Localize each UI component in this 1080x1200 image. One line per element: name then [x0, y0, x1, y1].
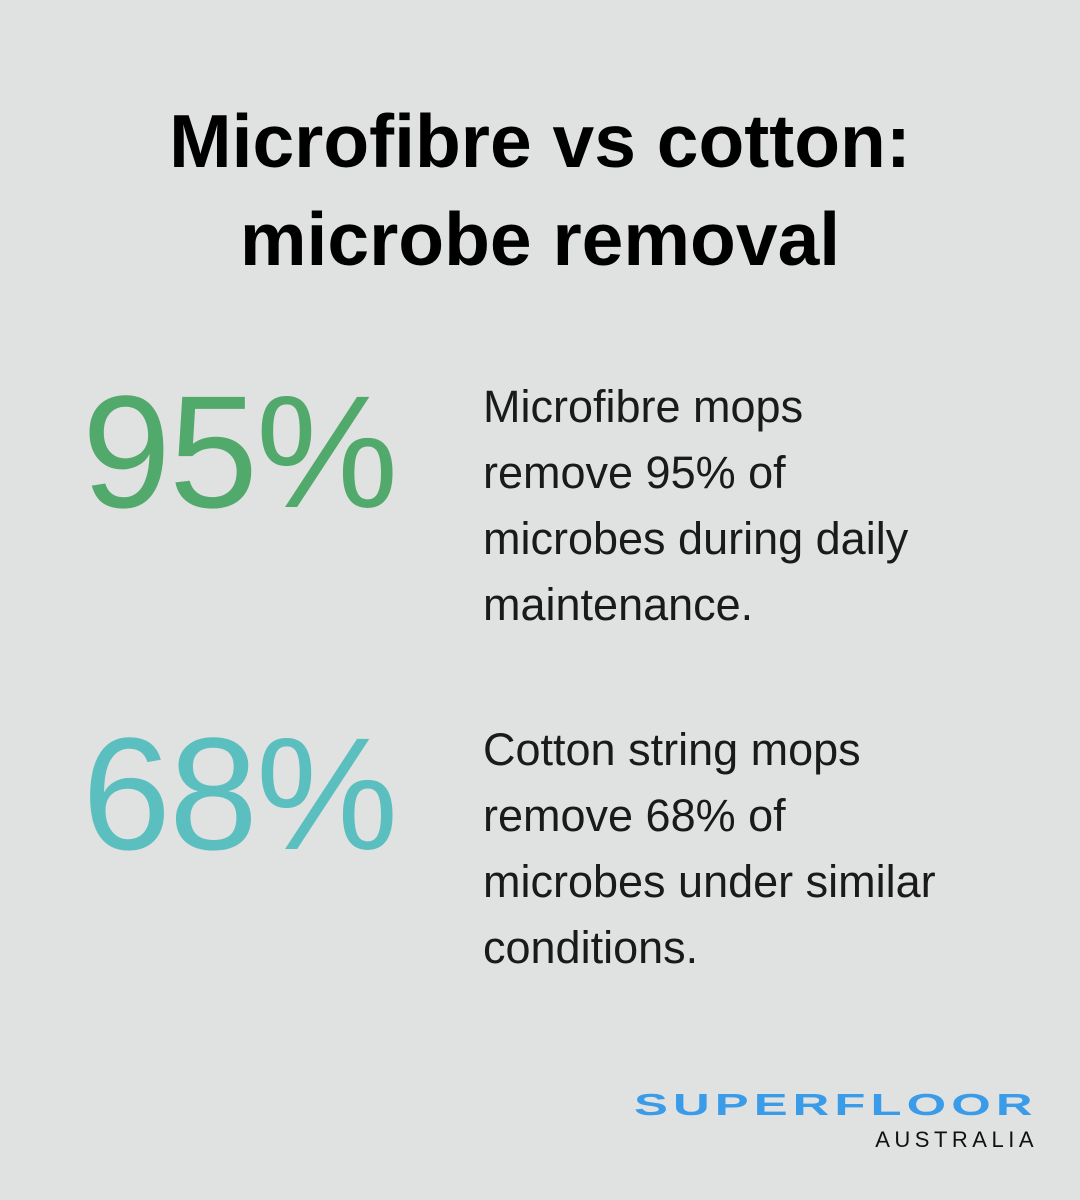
logo: Superfloor Australia — [634, 1088, 1038, 1152]
stat: microfibre 95%: 95% — [82, 362, 396, 541]
text: microfibre description: maintenance. — [483, 579, 753, 630]
text: cotton description — [483, 724, 936, 973]
text: cotton description: remove 68% of — [483, 790, 786, 841]
title — [169, 99, 911, 281]
text: cotton description: Cotton string mops — [483, 724, 861, 775]
text: microfibre description: remove 95% of — [483, 447, 786, 498]
text: microfibre description: microbes during daily — [483, 513, 908, 564]
logo: Superfloor Australia: SUPERFLOOR — [634, 1088, 1038, 1122]
title: Microfibre vs cotton: — [169, 99, 911, 183]
text: microfibre description — [483, 381, 908, 630]
text: cotton description: microbes under similar — [483, 856, 936, 907]
logo: Superfloor Australia: AUSTRALIA — [875, 1127, 1038, 1152]
text: microfibre description: Microfibre mops — [483, 381, 803, 432]
title: microbe removal — [240, 197, 840, 281]
text: cotton description: conditions. — [483, 922, 698, 973]
stat: cotton 68%: 68% — [82, 704, 396, 883]
